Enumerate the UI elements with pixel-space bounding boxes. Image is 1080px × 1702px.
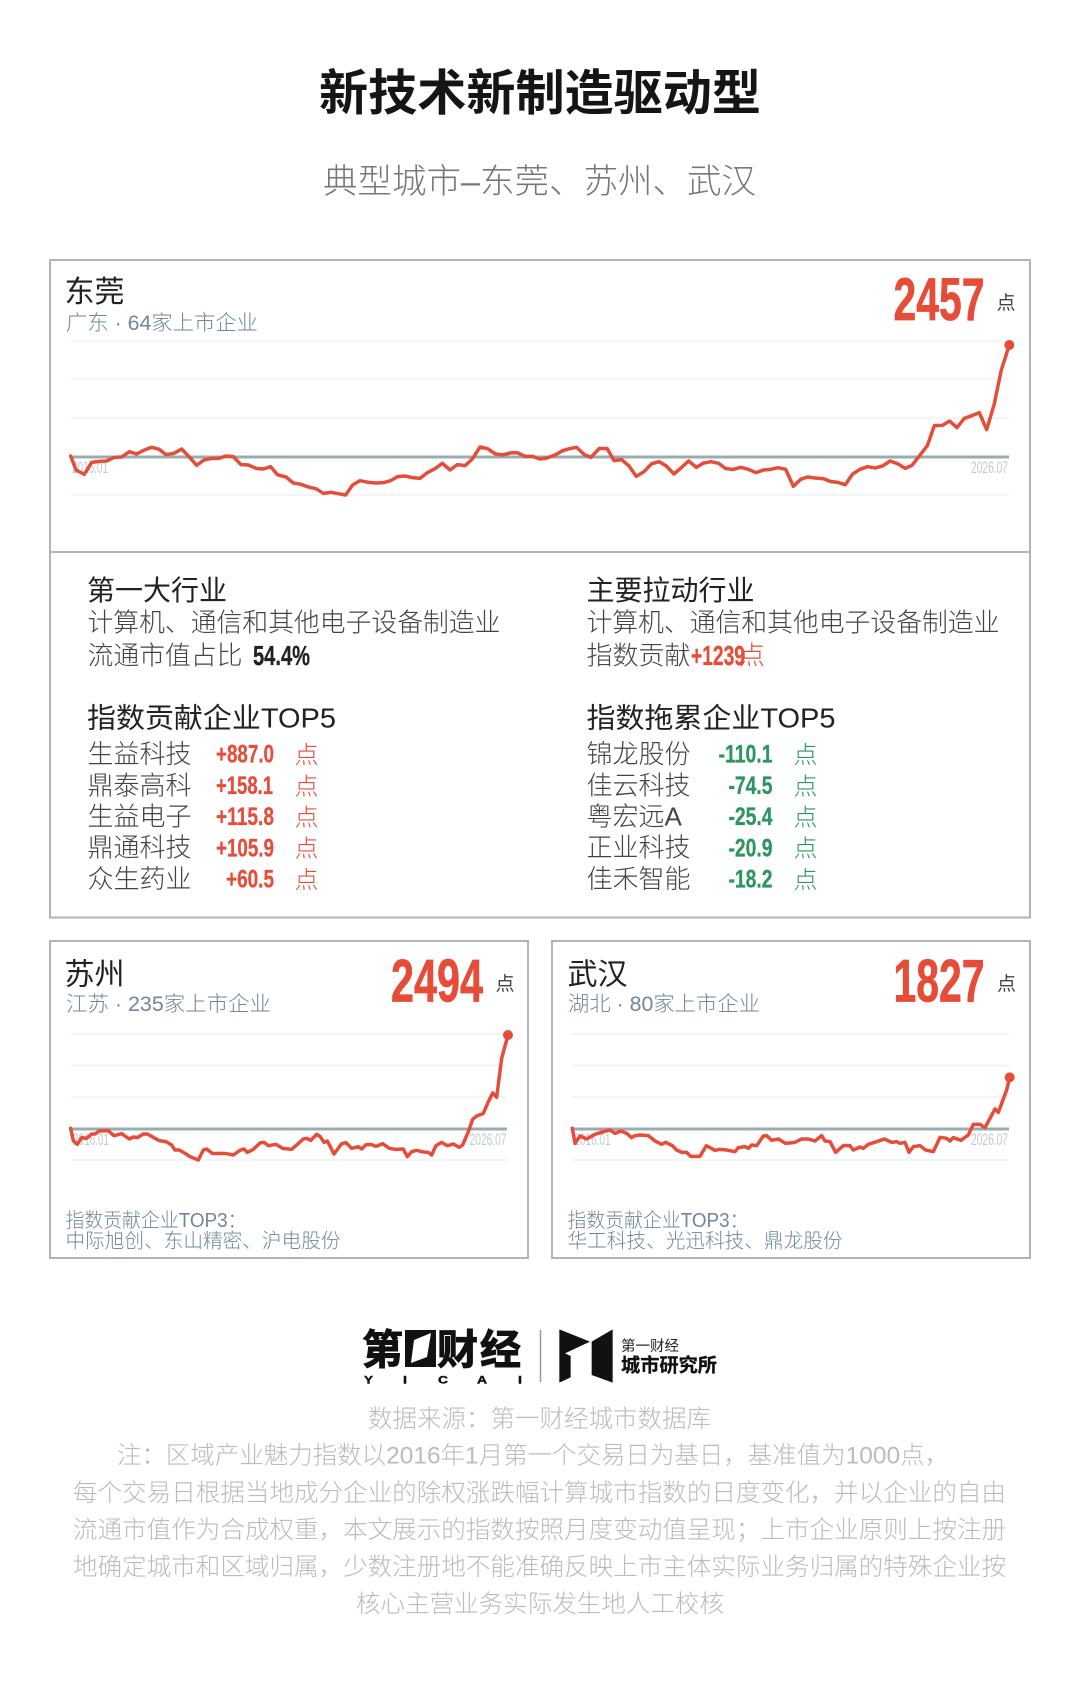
table: 指数贡献企业TOP5: 众生药业	[88, 864, 192, 894]
logo: 第一财经 YICAI: C	[438, 1374, 448, 1386]
text: 苏州 top 3 contributors	[66, 1209, 340, 1252]
text: 东莞 province and listed companies: 广东 · 64家上市企业	[66, 312, 258, 335]
heading: 苏州: 苏州	[64, 958, 124, 992]
text: 武汉 province and listed companies: 湖北 · 80家上市企业	[568, 993, 760, 1016]
table: 指数贡献企业TOP5: +105.9	[216, 834, 274, 862]
index value: 2457: 2457	[894, 266, 984, 333]
table: 指数贡献企业TOP5	[87, 702, 336, 894]
table: 指数拖累企业TOP5	[586, 702, 836, 894]
line chart: 苏州 index: 2016.01	[73, 1130, 109, 1149]
table: 指数贡献企业TOP5: +887.0	[216, 740, 274, 768]
table: 指数拖累企业TOP5: -20.9	[728, 834, 772, 862]
logo: 第一财经 YICAI: I	[403, 1374, 407, 1386]
footer: source and notes: 数据来源：第一财经城市数据库	[368, 1405, 711, 1433]
block: 主要拉动行业	[586, 575, 1000, 671]
block: 第一大行业: 第一大行业	[87, 575, 227, 606]
text: 武汉 top 3 contributors: 指数贡献企业TOP3：	[568, 1209, 748, 1232]
index value: 2494: 2494	[391, 948, 483, 1014]
table: 指数拖累企业TOP5: 点	[794, 867, 818, 894]
logo: 城市研究所: 城市研究所	[621, 1354, 717, 1376]
text: 苏州 top 3 contributors: 指数贡献企业TOP3：	[66, 1209, 246, 1232]
table: 指数拖累企业TOP5: 点	[794, 774, 818, 800]
logo: 第一财经 YICAI: I	[518, 1374, 522, 1386]
table: 指数贡献企业TOP5: 生益科技	[88, 739, 192, 769]
table: 指数贡献企业TOP5: 点	[294, 742, 318, 769]
text: 武汉 top 3 contributors: 华工科技、光迅科技、鼎龙股份	[568, 1230, 842, 1252]
block: 主要拉动行业: 主要拉动行业	[586, 575, 754, 606]
table: 指数贡献企业TOP5: 点	[294, 804, 318, 832]
table: 指数拖累企业TOP5: -74.5	[728, 772, 773, 800]
index value: 1827: 1827	[894, 948, 984, 1014]
line chart: 东莞 index: 2016.01	[72, 458, 108, 477]
table: 指数贡献企业TOP5: 鼎通科技	[88, 832, 192, 862]
title: 新技术新制造驱动型	[319, 67, 761, 121]
unit: 点: 点	[996, 292, 1016, 314]
text: 苏州 top 3 contributors: 中际旭创、东山精密、沪电股份	[66, 1230, 340, 1252]
logo: 第一财经 YICAI: 第	[362, 1327, 403, 1373]
table: 指数贡献企业TOP5: 点	[294, 867, 318, 894]
block: 第一大行业: 54.4%	[253, 640, 310, 671]
subtitle: 典型城市–东莞、苏州、武汉	[323, 163, 756, 201]
footer: source and notes: 地确定城市和区域归属，少数注册地不能准确反映上市主体实际业务归属的特殊企业按	[73, 1553, 1006, 1581]
table: 指数贡献企业TOP5: 鼎泰高科	[88, 770, 192, 800]
table: 指数拖累企业TOP5: 点	[794, 742, 818, 769]
table: 指数贡献企业TOP5: 点	[294, 836, 318, 862]
table: 指数贡献企业TOP5: 生益电子	[88, 802, 192, 832]
logo: 第一财经 YICAI: 财	[437, 1327, 478, 1373]
table: 指数拖累企业TOP5: 点	[794, 804, 818, 832]
block: 第一大行业: 计算机、通信和其他电子设备制造业	[88, 608, 500, 638]
unit: 点: 点	[496, 973, 515, 995]
unit: 点: 点	[997, 973, 1016, 995]
table: 指数拖累企业TOP5: 佳禾智能	[586, 864, 691, 894]
table: 指数拖累企业TOP5: -25.4	[728, 803, 773, 831]
logo: 第一财经 YICAI: A	[477, 1374, 487, 1386]
line chart: 东莞 index	[71, 340, 1014, 495]
table: 指数拖累企业TOP5: 佳云科技	[586, 770, 691, 800]
text: 苏州 province and listed companies: 江苏 · 235家上市企业	[66, 993, 271, 1016]
table: 指数拖累企业TOP5: 正业科技	[586, 832, 691, 862]
table: 指数拖累企业TOP5: 粤宏远A	[586, 802, 683, 832]
block: 第一大行业: 流通市值占比	[88, 640, 242, 670]
footer: source and notes: 核心主营业务实际发生地人工校核	[356, 1590, 724, 1618]
table: 指数贡献企业TOP5: 指数贡献企业TOP5	[87, 702, 336, 734]
table: 指数贡献企业TOP5: +60.5	[226, 866, 274, 894]
block: 主要拉动行业: 计算机、通信和其他电子设备制造业	[586, 608, 1000, 638]
line chart: 武汉 index: 2026.07	[971, 1130, 1008, 1149]
table: 指数拖累企业TOP5: -18.2	[728, 866, 772, 894]
line chart: 苏州 index	[71, 1030, 513, 1160]
line chart: 武汉 index: 2016.01	[574, 1130, 610, 1149]
table: 指数拖累企业TOP5: 点	[794, 836, 818, 862]
logo: 第一财经 YICAI: 经	[480, 1327, 521, 1373]
panel: 武汉	[552, 941, 1030, 1258]
line chart: 武汉 index	[572, 1034, 1015, 1160]
logo: 第一财经 YICAI	[362, 1327, 522, 1386]
panel: 东莞	[50, 260, 1030, 918]
logo: 城市研究所	[559, 1329, 717, 1383]
footer: source and notes: 流通市值作为合成权重，本文展示的指数按照月度变动值呈现；上市企业原则上按注册	[73, 1516, 1006, 1544]
heading: 武汉: 武汉	[568, 958, 628, 992]
table: 指数拖累企业TOP5: 指数拖累企业TOP5	[586, 702, 836, 734]
block: 主要拉动行业: +1239	[691, 640, 745, 671]
footer: source and notes: 每个交易日根据当地成分企业的除权涨跌幅计算城市指数的日度变化，并以企业的自由	[73, 1479, 1006, 1507]
table: 指数贡献企业TOP5: +158.1	[216, 772, 273, 800]
logo: 第一财经 YICAI: Y	[364, 1374, 374, 1386]
footer: source and notes: 注：区域产业魅力指数以2016年1月第一个交易日为基日，基准值为1000点，	[117, 1442, 949, 1470]
block: 主要拉动行业: 指数贡献	[586, 640, 690, 670]
block: 主要拉动行业: 点	[739, 640, 765, 670]
line chart: 东莞 index: 2026.07	[971, 458, 1008, 477]
table: 指数拖累企业TOP5: 锦龙股份	[586, 739, 691, 769]
text: 武汉 top 3 contributors	[568, 1209, 842, 1252]
logo: 城市研究所: 第一财经	[621, 1337, 679, 1355]
heading: 东莞: 东莞	[64, 276, 124, 309]
table: 指数拖累企业TOP5: -110.1	[718, 740, 773, 768]
panel: 苏州	[50, 941, 528, 1258]
footer: source and notes	[73, 1405, 1006, 1618]
block: 第一大行业	[87, 575, 500, 671]
table: 指数贡献企业TOP5: 点	[294, 774, 318, 800]
table: 指数贡献企业TOP5: +115.8	[216, 803, 274, 831]
line chart: 苏州 index: 2026.07	[470, 1130, 506, 1149]
